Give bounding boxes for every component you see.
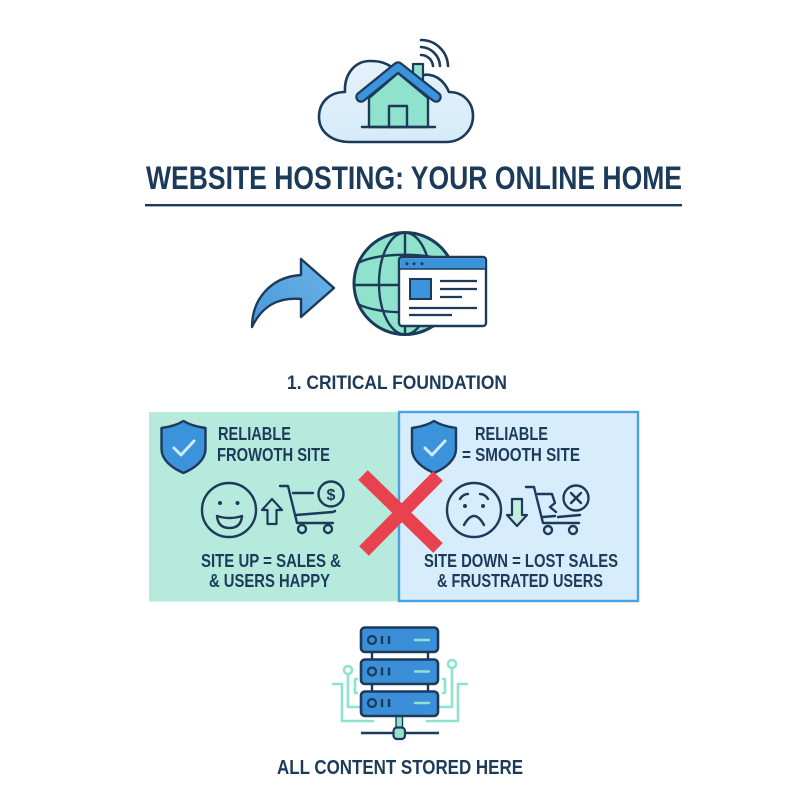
text: site up caption: & USERS HAPPY xyxy=(209,571,330,591)
arrow: curved pointing to globe xyxy=(252,259,334,327)
text: reliable heading left: FROWOTH SITE xyxy=(217,445,330,465)
text: site up caption: SITE UP = SALES & xyxy=(201,551,341,571)
text: site down caption: & FRUSTRATED USERS xyxy=(437,571,603,591)
icon: up arrow xyxy=(262,499,282,524)
icon: happy face xyxy=(202,483,256,537)
server unit 3 xyxy=(361,692,438,716)
text: reliable heading right xyxy=(462,424,580,465)
server unit 2 xyxy=(361,660,438,684)
text: reliable heading left xyxy=(217,424,330,465)
server unit 1 xyxy=(361,628,438,652)
icon: globe with browser window xyxy=(354,232,486,335)
icon: cloud house with wifi xyxy=(319,40,473,142)
icon: shield right xyxy=(412,421,456,473)
icon: down arrow xyxy=(507,499,527,526)
icon: sad face xyxy=(447,483,501,537)
text: site up caption xyxy=(201,551,341,591)
text: reliable heading right: RELIABLE xyxy=(475,424,548,444)
circuit lines xyxy=(333,660,467,721)
icon: red x xyxy=(363,475,438,551)
caption: all content stored here: ALL CONTENT STORED HERE xyxy=(277,756,523,779)
panel: site up xyxy=(149,412,398,602)
icon: cart with dollar coin xyxy=(280,482,344,533)
section heading: 1. CRITICAL FOUNDATION xyxy=(287,372,507,394)
icon: cart with dollar coin: $ xyxy=(327,487,336,504)
text: site down caption xyxy=(424,551,618,591)
title: WEBSITE HOSTING: YOUR ONLINE HOME xyxy=(146,160,682,196)
icon: server rack xyxy=(333,628,467,739)
panel: site down xyxy=(399,412,638,601)
text: reliable heading right: = SMOOTH SITE xyxy=(462,445,580,465)
icon: broken cart with x xyxy=(526,486,588,534)
icon: shield left xyxy=(162,421,206,473)
text: site down caption: SITE DOWN = LOST SALES xyxy=(424,551,618,571)
text: reliable heading left: RELIABLE xyxy=(218,424,291,444)
